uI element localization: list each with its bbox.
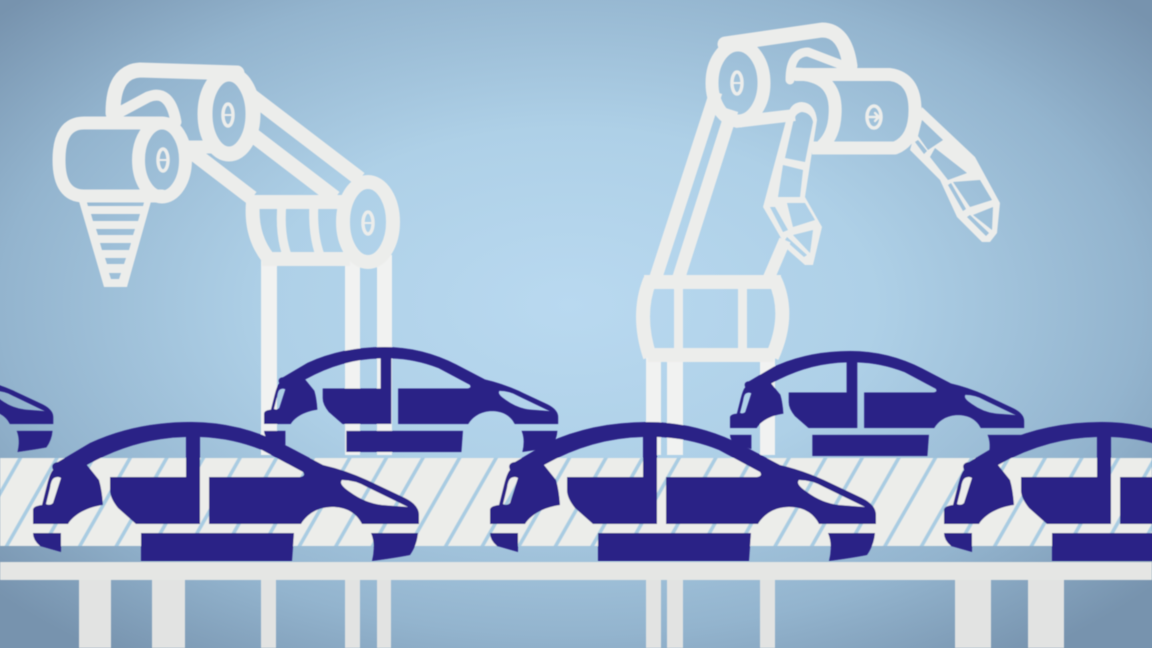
conveyor: legs: [79, 580, 1064, 648]
car: back row left: [264, 347, 558, 452]
support posts: [261, 255, 392, 455]
conveyor: rail: [0, 562, 1152, 580]
forearm cylinder: [795, 74, 915, 148]
wrist connector: [188, 140, 212, 154]
robot arm: gripper (right): [643, 30, 1000, 455]
left gripper finger: [763, 102, 822, 265]
shoulder housing: [247, 202, 350, 259]
elbow hub: [363, 212, 373, 234]
conveyor: hatched belt: [0, 458, 1152, 546]
right gripper finger: [910, 107, 1000, 242]
shoulder joint: [712, 45, 764, 121]
main joint: [205, 74, 253, 154]
upper arm bars: [188, 95, 360, 198]
top strap: [725, 30, 850, 66]
forearm front edge: [795, 74, 835, 146]
inner arch: [120, 95, 176, 122]
drill joint: [138, 123, 186, 197]
main hub: [223, 104, 233, 126]
car: front row centre: [490, 422, 876, 561]
car: front row right: [944, 422, 1152, 561]
drill hub: [158, 149, 168, 171]
drill bit: [78, 198, 152, 287]
support posts: [646, 350, 775, 455]
drill cylinder: [59, 123, 162, 196]
top strap: [113, 70, 237, 113]
car: front row left: [33, 422, 419, 561]
car: back row far left: [0, 347, 53, 452]
upper arm bars: [655, 92, 732, 280]
inner arch: [790, 52, 842, 80]
robot arm: drill (left): [59, 70, 393, 455]
car: back row right: [730, 351, 1024, 456]
elbow joint: [343, 182, 393, 262]
forearm hub: [867, 106, 881, 128]
base housing: [643, 280, 782, 357]
shoulder hub: [732, 72, 742, 94]
